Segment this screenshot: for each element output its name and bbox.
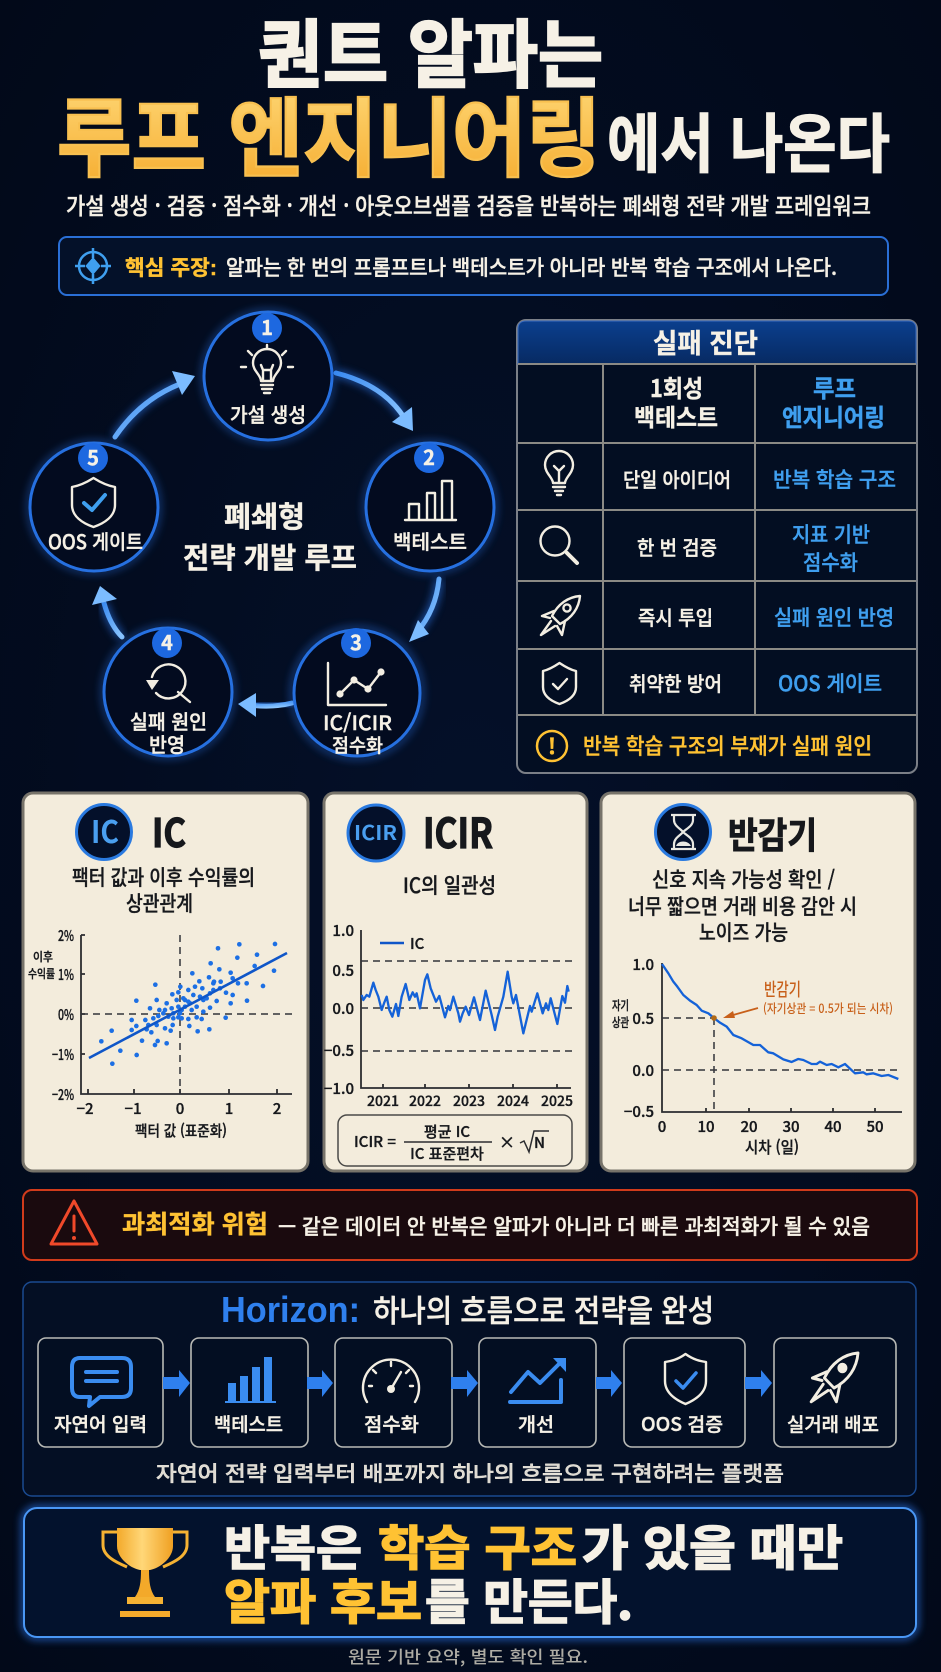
row: defense: OOS 게이트: [778, 668, 882, 698]
row: deployment: [541, 596, 894, 635]
step 3: IC/ICIR scoring: [292, 627, 422, 758]
arrow: [307, 1370, 333, 1397]
icon: bars: [405, 481, 456, 520]
panel: overfitting warning: [23, 1190, 917, 1260]
chart: scatter plot: 1: [225, 1098, 233, 1119]
formula box: N: [534, 1132, 545, 1153]
column header: loop engineering: 루프: [813, 369, 856, 404]
card description: IC의 일관성: [403, 870, 496, 900]
title: 에서 나온다: [607, 94, 890, 186]
column header: one-off backtest: 1회성: [650, 369, 703, 404]
chart: scatter plot: −2%: [52, 1084, 74, 1105]
subtitle: 가설 생성 · 검증 · 점수화 · 개선 · 아웃오브샘플 검증을 반복하는 폐쇄형 전략 개발 프레임워크: [66, 187, 871, 221]
column header: one-off backtest: 백테스트: [634, 398, 718, 433]
panel: closed loop diagram: [29, 311, 495, 758]
icon: shield check: [665, 1354, 706, 1404]
conclusion message: 학습 구조: [378, 1509, 577, 1579]
card description: 너무 짧으면 거래 비용 감안 시: [628, 891, 857, 921]
row: validation: 한 번 검증: [637, 532, 717, 561]
formula box: 평균 IC: [424, 1121, 470, 1142]
step 5: OOS gate: [29, 442, 159, 572]
callout text: 알파는 한 번의 프롬프트나 백테스트가 아니라 반복 학습 구조에서 나온다.: [226, 252, 837, 282]
chart: IC time series: 2021: [367, 1091, 399, 1111]
icon: line chart: [328, 663, 386, 705]
chart: autocorrelation decay: 자기: [612, 995, 629, 1014]
title: 루프 엔지니어링: [57, 69, 601, 194]
step 2: backtest: 백테스트: [393, 526, 467, 555]
arrow: [163, 1370, 190, 1397]
icon: trophy: [103, 1528, 187, 1617]
step: improvement: 개선: [518, 1410, 554, 1437]
arrow: [596, 1370, 622, 1397]
icon: ICIR badge: [348, 805, 404, 861]
step: backtest: 백테스트: [214, 1410, 283, 1437]
card description: 노이즈 가능: [699, 917, 788, 947]
step 4: failure feedback: 반영: [149, 729, 185, 758]
step 2: backtest: 2: [423, 442, 435, 471]
icon: magnifier: [540, 526, 577, 563]
chart: scatter plot: −1: [124, 1098, 142, 1119]
panel: IC card: [23, 793, 308, 1171]
chart: autocorrelation decay: 40: [824, 1116, 842, 1137]
chart: scatter plot: [28, 925, 292, 1141]
step: backtest: [191, 1338, 308, 1447]
chart: IC time series: 0.5: [332, 960, 354, 981]
step 1: hypothesis: 가설 생성: [230, 399, 306, 428]
flow caption: 자연어 전략 입력부터 배포까지 하나의 흐름으로 구현하려는 플랫폼: [156, 1458, 784, 1488]
conclusion message: 가 있을 때만: [582, 1509, 843, 1579]
row: idea: 반복 학습 구조: [773, 464, 896, 494]
panel: Horizon flow: [23, 1282, 916, 1496]
icon: bars: [225, 1357, 276, 1403]
row: idea: [545, 451, 896, 495]
chart: IC time series: 2023: [453, 1091, 485, 1111]
icon: rising trend: [510, 1358, 566, 1402]
chart: autocorrelation decay: 50: [866, 1116, 884, 1137]
card description: 신호 지속 가능성 확인 /: [652, 864, 835, 894]
chart: IC time series: −0.5: [324, 1040, 354, 1061]
loop center label: 폐쇄형: [224, 494, 305, 536]
icon: shield: [543, 663, 576, 704]
half-life annotation: (자기상관 = 0.5가 되는 시차): [763, 998, 893, 1017]
half-life annotation: [723, 976, 893, 1018]
chart: autocorrelation decay: [612, 954, 902, 1158]
chart: autocorrelation decay: 20: [740, 1116, 758, 1137]
icon: IC badge: [76, 804, 132, 860]
panel heading: [221, 1286, 714, 1331]
step: natural language input: 자연어 입력: [54, 1410, 147, 1437]
card description: 팩터 값과 이후 수익률의: [72, 862, 255, 892]
arrow: step 4 to 5: [92, 586, 122, 637]
step 5: OOS gate: 5: [87, 442, 99, 471]
conclusion message: 알파 후보: [224, 1563, 422, 1633]
chart: IC time series: 2025: [541, 1091, 573, 1111]
step: scoring: 점수화: [364, 1410, 419, 1437]
conclusion message: 를 만든다.: [425, 1563, 633, 1633]
icon: IC badge: IC: [91, 807, 119, 852]
chart: scatter plot: 2: [273, 1098, 281, 1119]
step 1: hypothesis: [203, 311, 333, 441]
conclusion message: 반복은: [224, 1509, 362, 1579]
chart: scatter plot: −1%: [52, 1044, 74, 1065]
column header: loop engineering: [782, 369, 885, 433]
table header: [518, 321, 916, 364]
icon: magnifier refresh: [146, 664, 190, 702]
chart: scatter plot: 이후: [33, 948, 53, 965]
icon: speech bubble: [72, 1358, 131, 1406]
chart: autocorrelation decay: 1.0: [632, 954, 654, 975]
row: defense: [543, 663, 882, 704]
title: [57, 0, 890, 194]
formula box: ICIR =: [354, 1131, 396, 1152]
card heading: ICIR: [423, 800, 493, 860]
row: defense: 취약한 방어: [629, 668, 722, 697]
row: validation: [540, 519, 870, 577]
chart: IC time series: 2024: [497, 1091, 529, 1111]
chart: autocorrelation decay: 10: [697, 1116, 715, 1137]
chart: scatter plot: 2%: [58, 925, 74, 946]
arrow: [745, 1370, 772, 1397]
chart: autocorrelation decay: 시차 (일): [745, 1134, 799, 1158]
chart: autocorrelation decay: 0: [658, 1116, 666, 1137]
step 3: IC/ICIR scoring: 점수화: [332, 731, 383, 758]
panel heading: 하나의 흐름으로 전략을 완성: [373, 1286, 714, 1331]
step: OOS validation: [624, 1338, 745, 1447]
step 3: IC/ICIR scoring: IC/ICIR: [323, 707, 392, 736]
step 4: failure feedback: 4: [161, 627, 173, 656]
panel: overfitting warning: 과최적화 위험: [122, 1205, 268, 1241]
panel heading: Horizon:: [221, 1289, 360, 1330]
icon: target: [75, 248, 111, 284]
step: improvement: [479, 1338, 596, 1447]
chart: scatter plot: 수익률: [28, 965, 55, 982]
chart: IC time series: [324, 920, 573, 1111]
row: deployment: 즉시 투입: [638, 602, 713, 631]
step: natural language input: [38, 1338, 163, 1447]
chart: scatter plot: 1%: [58, 964, 74, 985]
row: deployment: 실패 원인 반영: [774, 602, 894, 632]
card heading: IC: [152, 803, 186, 859]
conclusion message: [224, 1509, 843, 1633]
column header: loop engineering: 엔지니어링: [782, 398, 885, 433]
chart: autocorrelation decay: −0.5: [624, 1101, 654, 1122]
table footer note: !: [548, 729, 556, 761]
icon: warning triangle: [51, 1201, 97, 1244]
step 4: failure feedback: 실패 원인: [130, 706, 207, 735]
chart: autocorrelation decay: 상관: [612, 1012, 629, 1031]
card description: [628, 864, 857, 947]
step 1: hypothesis: 1: [261, 312, 273, 341]
chart: autocorrelation decay: 0.0: [632, 1060, 654, 1081]
panel: conclusion: [24, 1508, 916, 1637]
formula box: IC 표준편차: [410, 1143, 484, 1164]
formula box: [338, 1115, 572, 1166]
icon: ICIR badge: ICIR: [354, 817, 397, 846]
arrow: step 5 to 1: [115, 371, 195, 437]
chart: IC time series: 0.0: [332, 998, 354, 1019]
panel: half-life card: [601, 793, 915, 1171]
loop center label: [183, 494, 357, 577]
column header: one-off backtest: [634, 369, 718, 433]
card heading: 반감기: [728, 807, 817, 859]
arrow: step 2 to 3: [409, 579, 439, 642]
step 2: backtest: [365, 442, 495, 572]
step: live deployment: [774, 1338, 896, 1447]
formula box: ×: [499, 1129, 515, 1153]
row: idea: 단일 아이디어: [623, 464, 731, 493]
arrow: [451, 1370, 478, 1397]
chart: autocorrelation decay: 0.5: [632, 1008, 654, 1029]
icon: light bulb: [241, 345, 293, 393]
chart: scatter plot: 0%: [58, 1004, 74, 1025]
chart: IC time series: IC: [410, 933, 425, 954]
arrow: step 3 to 4: [238, 693, 292, 717]
icon: rocket: [811, 1353, 858, 1402]
step: OOS validation: OOS 검증: [641, 1410, 723, 1437]
panel: failure diagnosis table: [517, 320, 917, 773]
callout label: 핵심 주장:: [125, 252, 217, 282]
panel: overfitting warning: — 같은 데이터 안 반복은 알파가 아니라 더 빠른 과최적화가 될 수 있음: [278, 1211, 870, 1241]
chart: autocorrelation decay: 30: [782, 1116, 800, 1137]
chart: scatter plot: 팩터 값 (표준화): [135, 1120, 227, 1141]
step 4: failure feedback: [103, 627, 233, 758]
step 3: IC/ICIR scoring: 3: [350, 627, 362, 656]
step 5: OOS gate: OOS 게이트: [48, 526, 143, 555]
icon: hourglass badge: [656, 804, 710, 860]
step: scoring: [335, 1338, 452, 1447]
chart: IC time series: 1.0: [332, 920, 354, 941]
arrow: step 1 to 2: [336, 373, 413, 431]
half-life annotation: 반감기: [764, 976, 801, 1002]
table header: 실패 진단: [653, 322, 758, 361]
chart: scatter plot: 0: [176, 1098, 184, 1119]
icon: shield check: [72, 478, 115, 527]
chart: IC time series: −1.0: [324, 1078, 354, 1099]
panel: ICIR card: [324, 793, 587, 1171]
icon: rocket: [541, 596, 580, 635]
loop center label: 전략 개발 루프: [183, 535, 357, 577]
footnote: 원문 기반 요약, 별도 확인 필요.: [348, 1643, 588, 1668]
card description: [72, 862, 255, 918]
card description: 상관관계: [126, 888, 193, 918]
chart: scatter plot: −2: [76, 1098, 94, 1119]
icon: gauge: [363, 1360, 419, 1402]
callout: core claim: [59, 237, 888, 295]
step: live deployment: 실거래 배포: [787, 1410, 879, 1437]
table footer note: 반복 학습 구조의 부재가 실패 원인: [583, 729, 872, 761]
row: validation: 지표 기반: [792, 519, 870, 549]
icon: bulb: [545, 451, 573, 495]
row: validation: 점수화: [803, 547, 858, 577]
chart: IC time series: 2022: [409, 1091, 441, 1111]
